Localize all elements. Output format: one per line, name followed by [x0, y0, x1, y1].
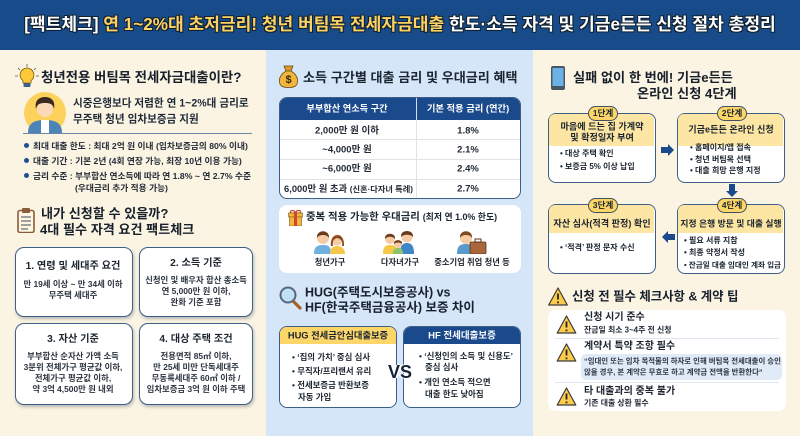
icon: warning	[556, 315, 576, 334]
heading: rates: 소득 구간별 대출 금리 및 우대금리 혜택	[303, 70, 518, 85]
icon group: multi-child household	[383, 231, 414, 254]
table header	[280, 98, 522, 120]
badge: step 1: 1단계	[593, 108, 613, 118]
badge: step 2: 2단계	[722, 108, 742, 118]
callout: contract quote	[581, 354, 782, 380]
step 2: 기금e든든 온라인 신청	[688, 125, 774, 135]
heading: four requirements: 4대 필수 자격 요건 팩트체크	[40, 222, 194, 237]
item: application timing	[556, 311, 672, 334]
badge: step 3	[588, 198, 618, 213]
card: assets: 약 3억 4,500만 원 내외	[32, 384, 114, 394]
card: income: 완화 기준 포함	[171, 297, 221, 307]
panel: HF guarantee: • 개인 연소득 적으면	[419, 377, 491, 387]
icon: light bulb	[15, 64, 39, 87]
row 3: 2.4%	[457, 163, 479, 174]
heading: what is it: 청년전용 버팀목 전세자금대출이란?	[41, 70, 241, 85]
background panel: right column	[533, 50, 800, 436]
table: income bracket rates	[279, 97, 521, 199]
step 4: 지정 은행 방문 및 대출 실행	[680, 219, 782, 229]
icon: money bag	[279, 66, 298, 88]
step 2	[677, 113, 785, 183]
card: income: 2. 소득 기준	[170, 258, 222, 269]
callout: contract quote: “임대인 또는 임차 목적물의 하자로 인해 버팀목 전세대출이 승인	[584, 357, 781, 366]
card: housing: 임차보증금 3억 원 이하 주택	[147, 384, 245, 394]
list: loan facts: 대출 기간 : 기본 2년 (4회 연장 가능, 최장 10년 이용 가능)	[33, 156, 242, 166]
icon: young person avatar	[24, 92, 66, 133]
heading: four requirements	[17, 206, 194, 237]
item: no duplicate loans: 기존 대출 상환 필수	[584, 398, 649, 407]
card: housing: 전용면적 85㎡ 이하,	[161, 351, 231, 361]
icon group: SME youth	[457, 231, 486, 254]
step 3	[548, 204, 656, 274]
list: loan facts: 금리 수준 : 부부합산 연소득에 따라 연 1.8% ~ 연 2.7% 수준	[33, 171, 251, 181]
list: HUG features: • ‘집의 가치’ 중심 심사	[292, 352, 370, 362]
card: assets: 전체가구 평균값 이하,	[35, 373, 111, 383]
row 1: 1.8%	[457, 125, 479, 136]
heading: rates	[279, 66, 518, 88]
item: application timing: 신청 시기 준수	[584, 312, 645, 323]
item: special clause	[556, 340, 782, 380]
title banner: [팩트체크] 연 1~2%대 초저금리! 청년 버팀목 전세자금대출 한도·소득 자격 및 기금e든든 신청 절차 총정리	[24, 15, 776, 34]
badge: step 2	[717, 106, 747, 121]
callout: contract quote: 않을 경우, 본 계약은 무효로 하고 계약금 전액을 반환한다”	[584, 368, 763, 377]
heading: preferential rates: 중복 적용 가능한 우대금리 (최저 연 1.0% 한도)	[306, 212, 497, 223]
row 2: ~4,000만 원	[322, 144, 372, 155]
header: HF	[404, 327, 520, 344]
card: assets	[15, 323, 133, 405]
card: income: 신청인 및 배우자 합산 총소득	[145, 275, 247, 285]
heading: online application	[551, 66, 737, 101]
panel: what is the loan	[15, 64, 252, 193]
panel: HUG guarantee: • 전세보증금 반환보증	[292, 380, 369, 390]
step 2: • 청년 버팀목 선택	[690, 155, 751, 164]
item: application timing: 잔금일 최소 3~4주 전 신청	[584, 325, 672, 334]
step 1: 및 확정일자 부여	[570, 133, 634, 143]
list: loan facts: 최대 대출 한도 : 최대 2억 원 이내 (입차보증금의 80% 이내)	[33, 141, 248, 151]
card: age and household: 1. 연령 및 세대주 요건	[26, 261, 120, 272]
icon group: young household	[314, 231, 345, 254]
badge: step 4: 4단계	[722, 200, 742, 210]
heading: checklist	[548, 287, 738, 306]
list: loan facts: (우대금리 추가 적용 가능)	[75, 183, 168, 193]
card: income: 연 5,000만 원 이하,	[162, 286, 230, 296]
step 1: 마음에 드는 집 가계약	[561, 122, 643, 132]
icon: warning	[556, 343, 576, 362]
text: summary: 시중은행보다 저렴한 연 1~2%대 금리로	[73, 98, 249, 110]
card: income	[139, 247, 253, 317]
icon: clipboard	[17, 208, 35, 233]
step 4: • 필요 서류 지참	[684, 236, 738, 245]
card: assets: 3분위 전체가구 평균값 이하,	[24, 362, 122, 372]
panel: preferential rates	[279, 205, 521, 273]
item: no duplicate loans	[556, 385, 675, 407]
panel: HUG guarantee: • 무직자/프리랜서 유리	[292, 366, 371, 376]
card: assets: 3. 자산 기준	[47, 334, 99, 345]
card: housing: 4. 대상 주택 조건	[159, 334, 233, 345]
icon: warning	[556, 387, 576, 406]
background panel: middle column	[266, 50, 533, 436]
arrow: step 4 to 3	[662, 231, 675, 243]
card: age and household	[15, 247, 133, 317]
header: HUG	[280, 327, 396, 344]
card: housing: 만 25세 미만 단독세대주	[153, 362, 239, 372]
panel: HF guarantee	[403, 326, 521, 408]
icon: warning triangle	[548, 287, 568, 306]
card: assets: 부부합산 순자산 가액 소득	[27, 351, 119, 361]
heading: HUG vs HF: HF(한국주택금융공사) 보증 차이	[305, 300, 475, 314]
icon: magnifying glass	[280, 286, 302, 310]
panel: what is the loan: 무주택 청년 임차보증금 지원	[73, 114, 199, 126]
panel: HUG guarantee: 자동 가입	[298, 392, 331, 402]
step 2: • 대출 희망 은행 지정	[690, 166, 761, 175]
panel: checklist	[548, 310, 786, 411]
table header: 부부합산 연소득 구간	[306, 103, 388, 113]
step 3: 자산 심사(적격 판정) 확인	[553, 219, 651, 229]
icon: money bag: $	[285, 74, 292, 86]
card: age and household: 만 19세 이상 ~ 만 34세 이하	[23, 279, 123, 289]
step 3: • ‘적격’ 판정 문자 수신	[560, 243, 635, 252]
item: special clause: 계약서 특약 조항 필수	[584, 341, 675, 352]
badge: step 3: 3단계	[593, 200, 613, 210]
item: no duplicate loans: 타 대출과의 중복 불가	[584, 386, 675, 397]
row 4: 6,000만 원 초과 (신혼·다자녀 특례)	[284, 183, 413, 194]
heading: four requirements: 내가 신청할 수 있을까?	[41, 206, 168, 221]
row 4	[280, 179, 520, 199]
label: VS: VS	[388, 362, 412, 382]
table header: 기본 적용 금리 (연간)	[427, 103, 509, 113]
row 1	[315, 125, 479, 136]
heading: online application: 실패 없이 한 번에! 기금e든든	[573, 70, 733, 85]
label: young household: 청년가구	[315, 257, 345, 267]
step 4: • 최종 약정서 작성	[684, 248, 745, 257]
row 3: ~6,000만 원	[322, 163, 372, 174]
label: SME youth: 중소기업 취업 청년 등	[434, 257, 510, 267]
background panel: left column	[0, 50, 266, 436]
step 4	[677, 204, 785, 274]
heading: HUG vs HF	[280, 286, 475, 314]
panel: HF guarantee: 중심 심사	[425, 362, 458, 372]
list: loan facts	[24, 141, 251, 193]
heading: checklist: 신청 전 필수 체크사항 & 계약 팁	[572, 290, 738, 304]
step 4: • 잔금일 대출 임대인 계좌 입금	[684, 260, 781, 269]
list: HF features: • ‘신청인의 소득 및 신용도’	[419, 351, 513, 361]
arrow: step 2 to 4	[726, 184, 738, 197]
step 1: • 보증금 5% 이상 납입	[560, 162, 635, 171]
row 2	[280, 139, 520, 159]
header: HF: HF 전세대출보증	[428, 330, 496, 341]
row 3	[280, 159, 520, 179]
row 2: 2.1%	[457, 144, 479, 155]
row 1: 2,000만 원 이하	[315, 125, 379, 136]
heading: HUG vs HF: HUG(주택도시보증공사) vs	[305, 286, 450, 300]
panel: HF guarantee: 대출 한도 낮아짐	[425, 389, 484, 399]
label: multi-child household: 다자녀가구	[381, 257, 419, 267]
heading: online application: 온라인 신청 4단계	[637, 86, 737, 101]
card: housing: 무동록세대주 60㎡ 이하 /	[152, 373, 240, 383]
step 1	[548, 113, 656, 183]
badge: step 1	[588, 106, 618, 121]
step 1: • 대상 주택 확인	[560, 149, 614, 158]
row 4: 2.7%	[457, 183, 479, 194]
step 2: • 홈페이지/앱 접속	[690, 143, 751, 152]
icon: gift box	[288, 210, 303, 226]
arrow: step 1 to 2	[661, 144, 674, 156]
panel: HUG guarantee	[279, 326, 397, 408]
badge: step 4	[717, 198, 747, 213]
card: age and household: 무주택 세대주	[49, 290, 97, 300]
header: HUG: HUG 전세금안심대출보증	[288, 330, 388, 340]
title banner	[0, 0, 800, 50]
icon: smartphone	[551, 66, 565, 90]
card: housing	[139, 323, 253, 405]
